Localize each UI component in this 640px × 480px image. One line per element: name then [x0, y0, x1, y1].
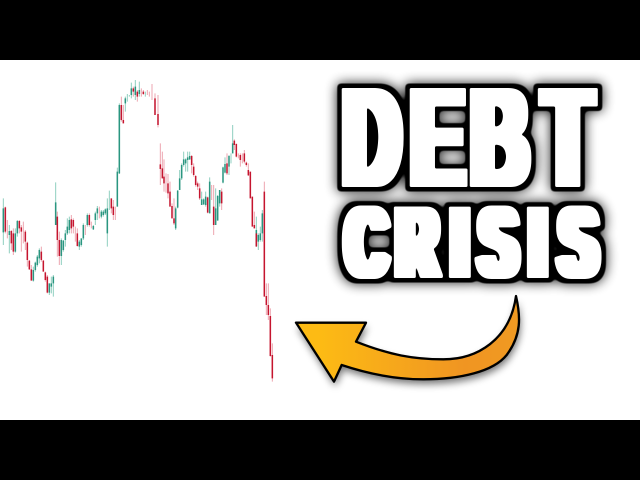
arrow pointing to the chart low — [296, 296, 520, 386]
heading: DEBT: DEBT — [344, 60, 592, 215]
arrow body — [296, 296, 519, 382]
bottom black bar — [0, 420, 640, 480]
white chart area — [0, 60, 640, 420]
title: DEBT CRISIS — [344, 60, 597, 299]
arrow shadow — [297, 301, 520, 386]
top black bar — [0, 0, 640, 60]
candlestick chart — [3, 80, 272, 382]
heading: CRISIS: CRISIS — [347, 188, 597, 299]
